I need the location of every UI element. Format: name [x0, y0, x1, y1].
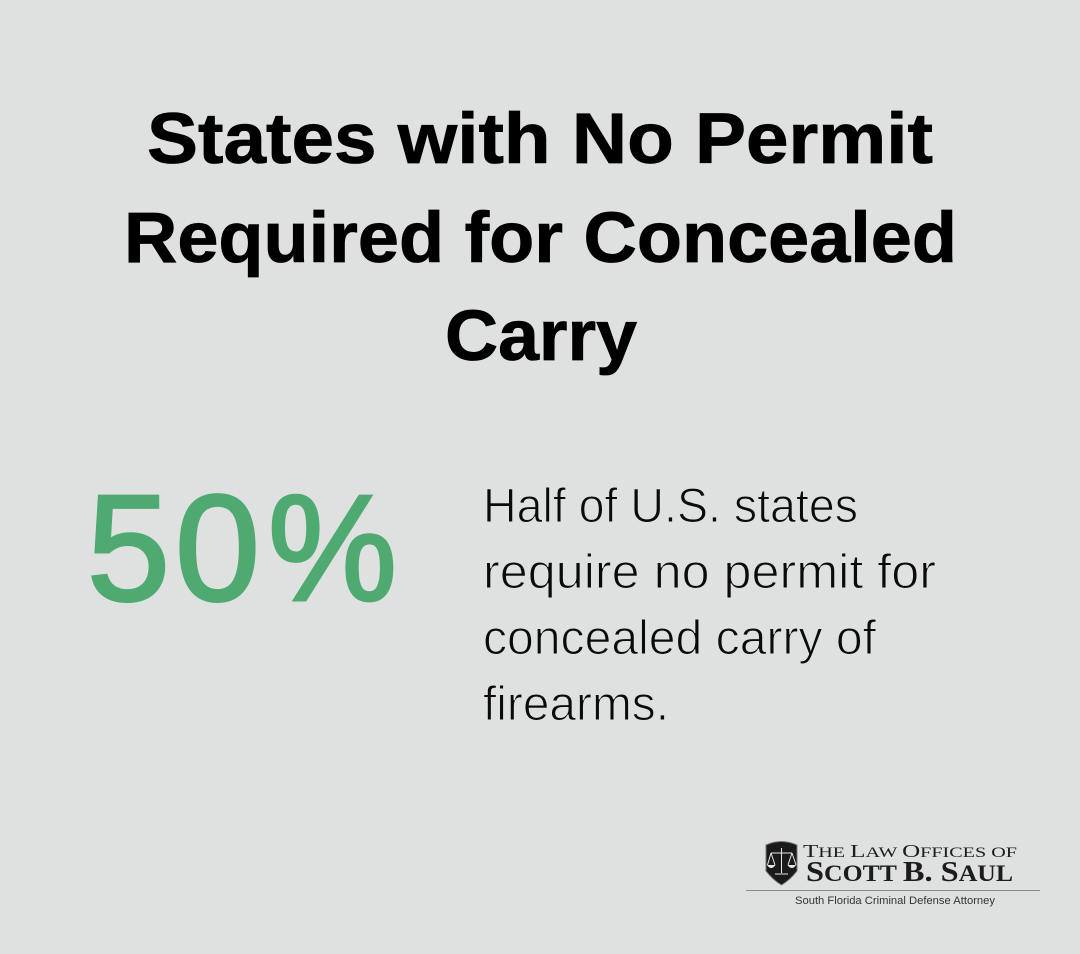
title: [124, 100, 957, 376]
title: Carry: [445, 297, 638, 376]
firm name: T HE L AW O FFICES OF: [803, 841, 1017, 861]
description text: Half of U.S. states: [483, 480, 858, 533]
icon: shield with scales: [766, 842, 797, 885]
title: Required for Concealed: [124, 199, 957, 278]
description text: [483, 480, 936, 731]
statistic: 50%: %: [268, 463, 397, 632]
statistic: 50%: 0: [175, 463, 260, 632]
statistic: 50%: [87, 463, 397, 632]
tagline: South Florida Criminal Defense Attorney: [795, 895, 996, 907]
logo: The Law Offices of Scott B. Saul: [746, 841, 1040, 907]
description text: require no permit for: [483, 546, 936, 599]
title: States with No Permit: [147, 100, 933, 179]
firm name: Scott B. Saul: SCOTT B. S AUL: [806, 856, 1013, 888]
statistic: 50%: 5: [87, 463, 170, 632]
description text: firearms.: [483, 678, 669, 731]
description text: concealed carry of: [483, 612, 877, 665]
